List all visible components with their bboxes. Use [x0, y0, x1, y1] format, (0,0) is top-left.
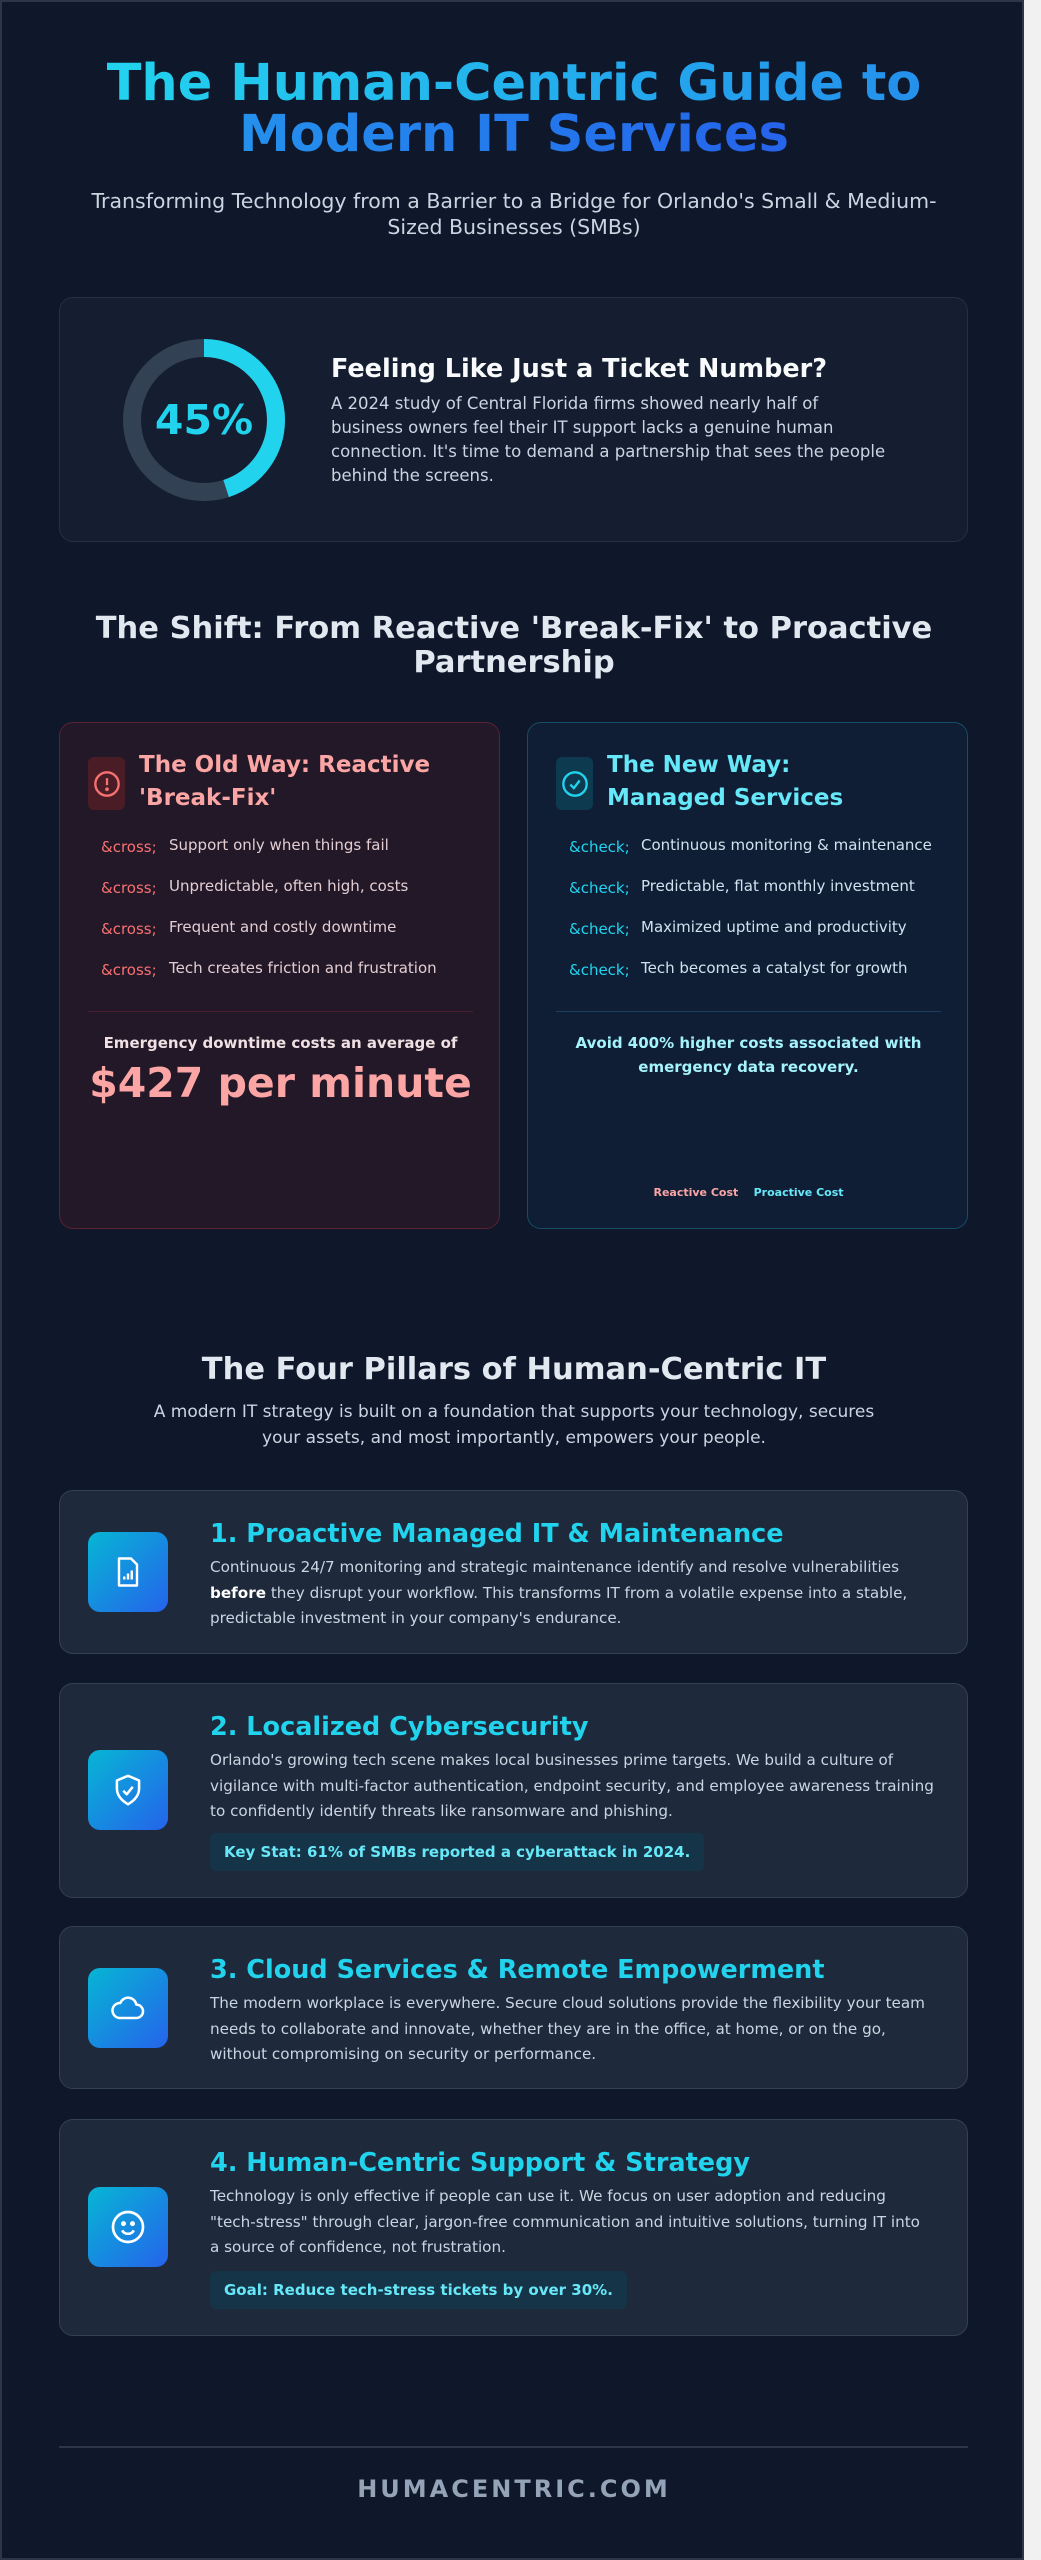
pillar title: 1. Proactive Managed IT & Maintenance: [210, 1519, 784, 1549]
list: &cross;: [101, 879, 157, 897]
panel: pillar 2: [59, 1683, 968, 1898]
pillar text: without compromising on security or performance.: [210, 2045, 596, 2063]
pillar text: vigilance with multi-factor authentication, endpoint security, and employee awareness training: [210, 1776, 934, 1794]
intro text: your assets, and most importantly, empowers your people.: [262, 1428, 766, 1448]
pillar text: [210, 2187, 920, 2256]
icon: alert: [88, 757, 125, 810]
card title: The Old Way: Reactive: [139, 752, 430, 778]
panel: old way: [59, 722, 500, 1229]
intro text: A modern IT strategy is built on a foundation that supports your technology, secures: [154, 1402, 874, 1422]
title: The Human-Centric Guide to: [107, 54, 921, 113]
pillar text: before they disrupt your workflow. This transforms IT from a volatile expense into a stable,: [210, 1584, 907, 1602]
pillar text: [210, 1558, 907, 1627]
pillar text: Orlando's growing tech scene makes local businesses prime targets. We build a culture of: [210, 1751, 893, 1769]
footer: HUMACENTRIC.COM: [357, 2475, 671, 2503]
pillar title: 2. Localized Cybersecurity: [210, 1712, 588, 1742]
icon: cloud: [88, 1968, 168, 2048]
key stat: Key Stat: 61% of SMBs reported a cyberattack in 2024.: [224, 1843, 690, 1861]
card title: [139, 752, 430, 811]
pillar text: Continuous 24/7 monitoring and strategic maintenance identify and resolve vulnerabilities: [210, 1558, 899, 1576]
list: Unpredictable, often high, costs: [169, 877, 408, 895]
title: Modern IT Services: [239, 105, 789, 164]
list: [101, 836, 437, 979]
title: [107, 54, 921, 164]
goal box: Goal: Reduce tech-stress tickets by over 30%.: [224, 2281, 613, 2299]
text block: A 2024 study of Central Florida firms showed nearly half of: [331, 394, 818, 413]
list: &cross;: [101, 920, 157, 938]
pillar text: a source of confidence, not frustration.: [210, 2238, 506, 2256]
callout: [576, 1034, 921, 1076]
list: &cross;: [101, 961, 157, 979]
callout: Avoid 400% higher costs associated with: [576, 1034, 921, 1052]
panel: stat card: [59, 297, 968, 542]
pillar text: "tech-stress" through clear, jargon-free communication and intuitive solutions, turning IT into: [210, 2212, 920, 2230]
list: Continuous monitoring & maintenance: [641, 836, 932, 854]
subtitle: Sized Businesses (SMBs): [387, 215, 641, 239]
chart legend: Reactive Cost Proactive Cost: [653, 1186, 844, 1199]
card title: [607, 752, 843, 811]
list: &check;: [569, 920, 630, 938]
pillar text: predictable investment in your company's endurance.: [210, 1609, 622, 1627]
text block: [331, 394, 885, 485]
callout: Emergency downtime costs an average of: [104, 1034, 457, 1052]
text block: behind the screens.: [331, 466, 494, 485]
list: Tech becomes a catalyst for growth: [641, 959, 908, 977]
pillar title: 4. Human-Centric Support & Strategy: [210, 2148, 750, 2178]
pillar text: [210, 1994, 925, 2063]
subtitle: [91, 189, 936, 239]
list: Support only when things fail: [169, 836, 389, 854]
panel: new way: [527, 722, 968, 1229]
goal box: [210, 2271, 627, 2309]
pillar text: needs to collaborate and innovate, whether they are in the office, at home, or on the go,: [210, 2020, 886, 2038]
card title: 'Break-Fix': [139, 785, 276, 811]
panel: pillar 1: [59, 1490, 968, 1654]
list: &cross;: [101, 838, 157, 856]
chart: donut 45%: [123, 339, 285, 501]
list: Maximized uptime and productivity: [641, 918, 907, 936]
list: Tech creates friction and frustration: [169, 959, 437, 977]
card title: The New Way:: [607, 752, 790, 778]
heading: Feeling Like Just a Ticket Number?: [331, 354, 827, 384]
text block: business owners feel their IT support lacks a genuine human: [331, 418, 833, 437]
key stat: [210, 1833, 704, 1871]
heading: the shift: The Shift: From Reactive 'Break-Fix' to Proactive: [96, 611, 932, 646]
chart: donut 45%: 45%: [155, 396, 253, 444]
icon: shield: [88, 1750, 168, 1830]
list: [569, 836, 932, 979]
heading: the shift: Partnership: [413, 645, 615, 680]
pillar title: 3. Cloud Services & Remote Empowerment: [210, 1955, 825, 1985]
list: &check;: [569, 838, 630, 856]
list: Frequent and costly downtime: [169, 918, 396, 936]
pillar text: The modern workplace is everywhere. Secure cloud solutions provide the flexibility your team: [210, 1994, 925, 2012]
pillar text: [210, 1751, 934, 1820]
icon: check: [556, 757, 593, 810]
big stat: $427 per minute: [89, 1059, 472, 1107]
pillar text: Technology is only effective if people can use it. We focus on user adoption and reducing: [210, 2187, 886, 2205]
heading: four pillars: The Four Pillars of Human-Centric IT: [202, 1352, 826, 1387]
heading: the shift: [96, 611, 932, 680]
icon: document chart: [88, 1532, 168, 1612]
subtitle: Transforming Technology from a Barrier to a Bridge for Orlando's Small & Medium-: [92, 189, 936, 213]
list: &check;: [569, 879, 630, 897]
icon: smiley: [88, 2187, 168, 2267]
intro text: [154, 1402, 874, 1448]
callout: emergency data recovery.: [638, 1058, 859, 1076]
list: Predictable, flat monthly investment: [641, 877, 915, 895]
panel: pillar 4: [59, 2119, 968, 2336]
pillar text: to confidently identify threats like ransomware and phishing.: [210, 1802, 673, 1820]
card title: Managed Services: [607, 785, 843, 811]
panel: pillar 3: [59, 1926, 968, 2089]
list: &check;: [569, 961, 630, 979]
text block: connection. It's time to demand a partnership that sees the people: [331, 442, 885, 461]
